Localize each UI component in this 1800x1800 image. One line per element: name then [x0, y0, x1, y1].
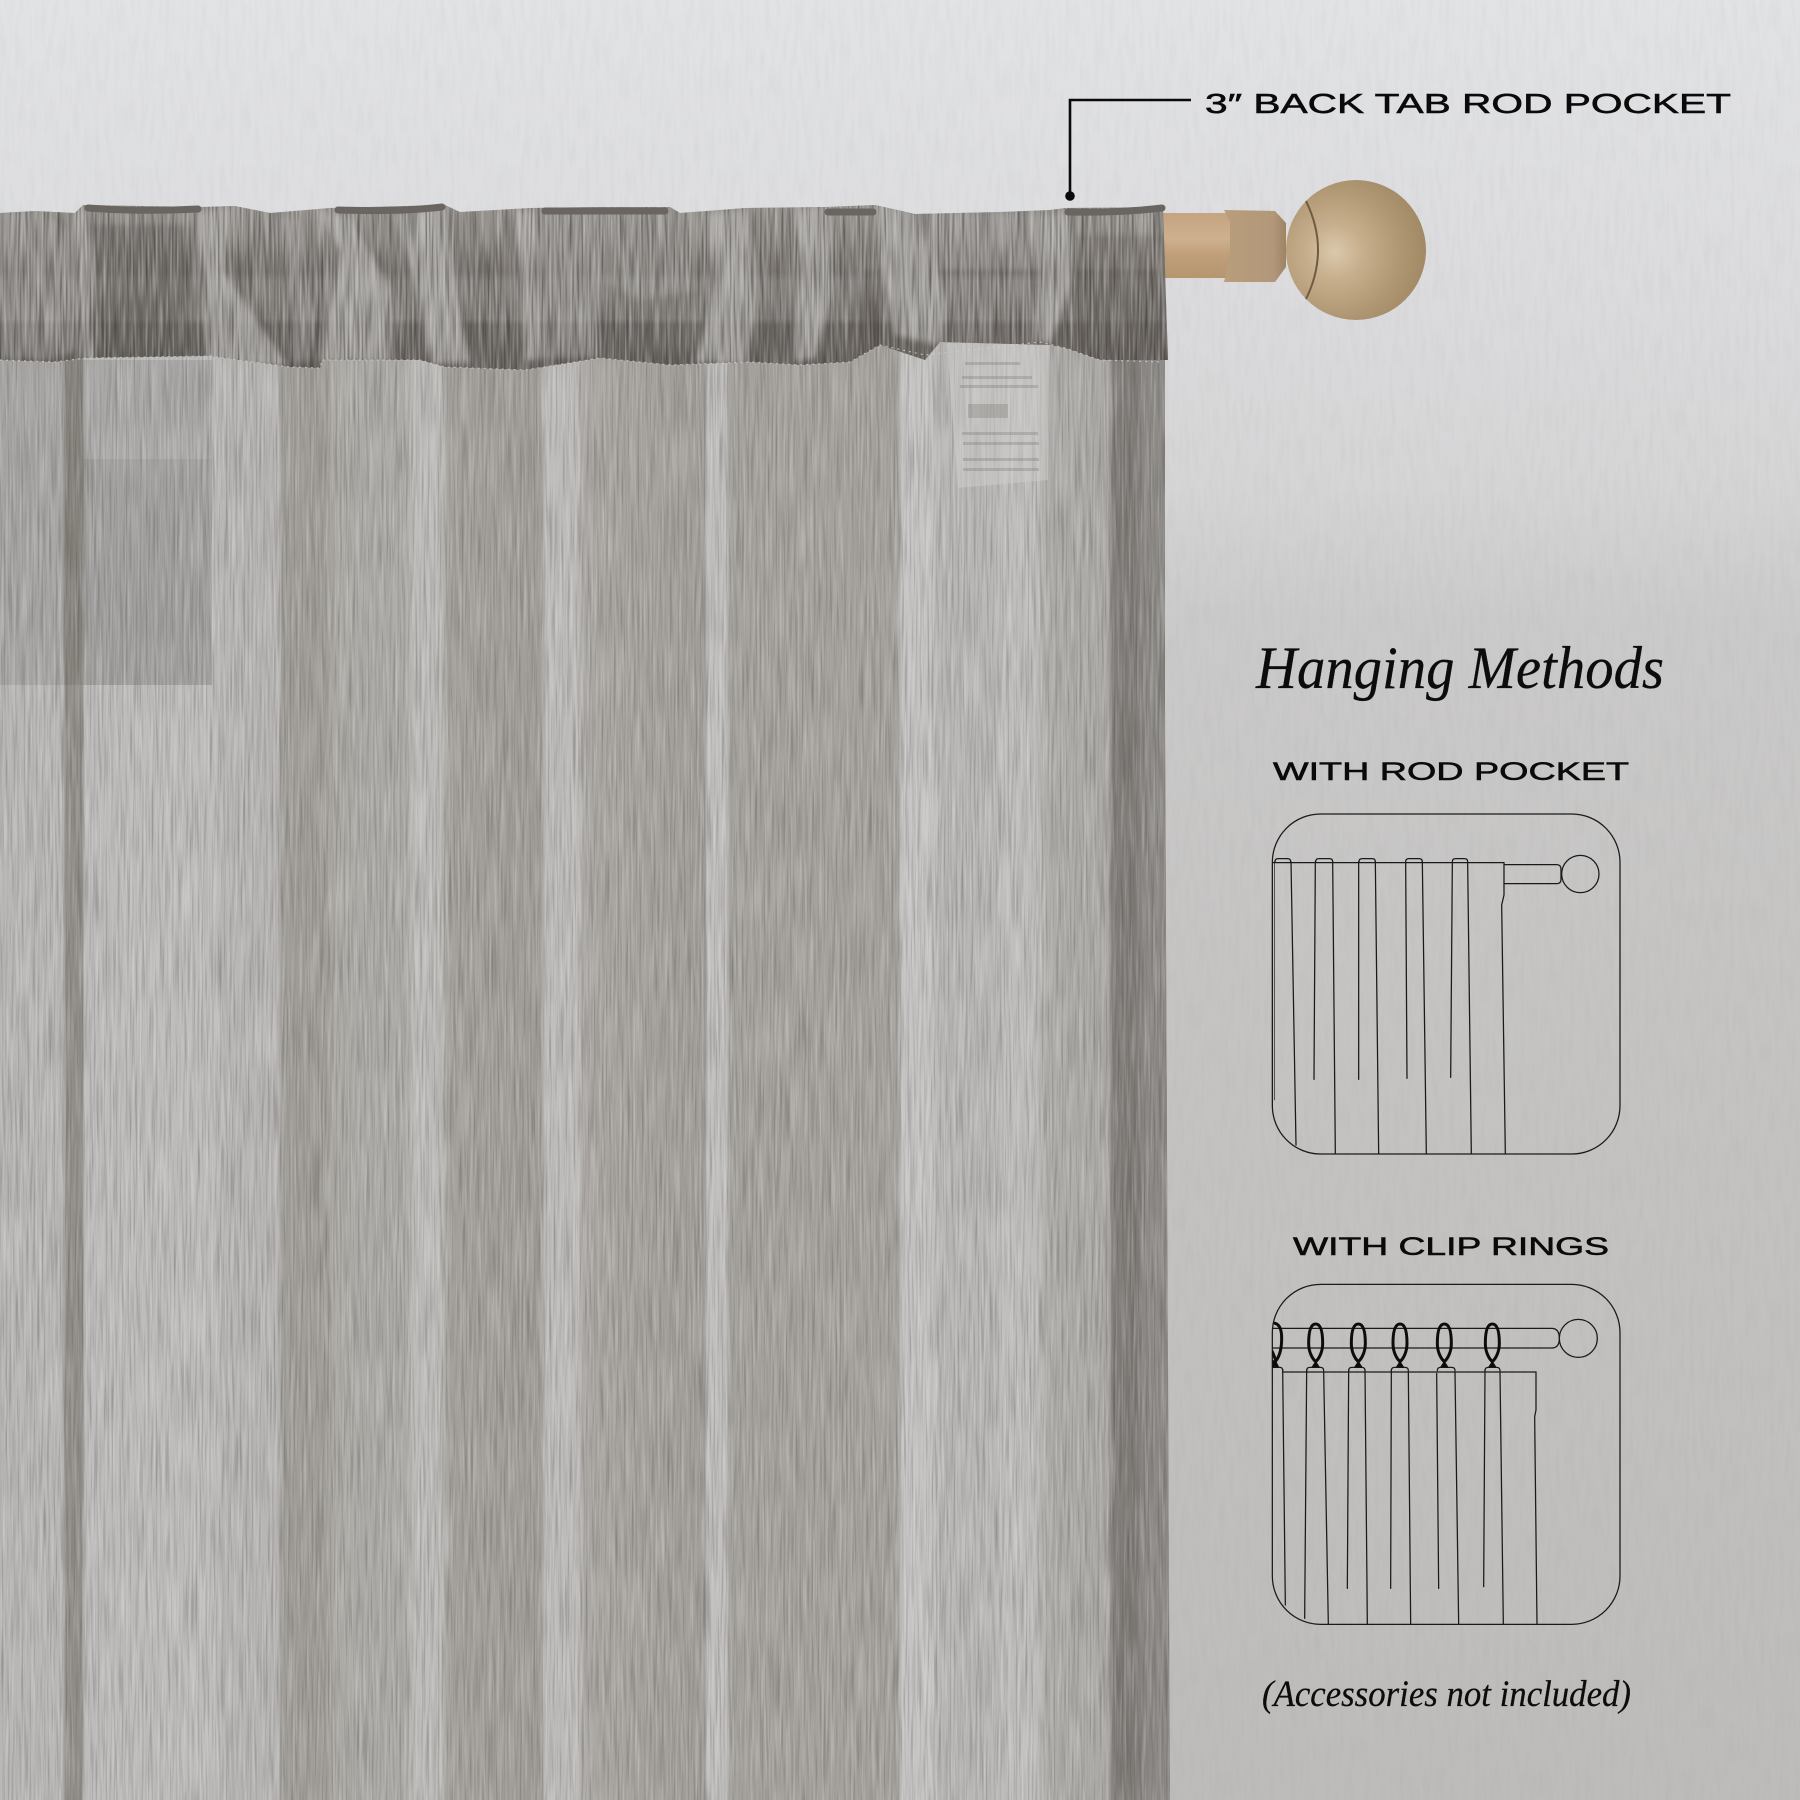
light folds — [0, 203, 1163, 366]
label: with rod pocket: WITH ROD POCKET — [1273, 758, 1629, 786]
crinkle texture — [0, 340, 1170, 1800]
curtain panel — [0, 200, 1170, 1800]
pleat texture — [0, 200, 1170, 375]
sheer fabric bands — [0, 340, 1170, 1800]
ball finial — [1286, 180, 1426, 320]
leader line — [1070, 100, 1191, 192]
tonal columns — [85, 225, 1165, 365]
curtain rod and finial — [1160, 180, 1426, 320]
label: with clip rings: WITH CLIP RINGS — [1293, 1233, 1609, 1261]
care label seen through the fabric — [947, 335, 1050, 488]
back tab top edges — [88, 207, 1162, 212]
icon: clip rings diagram — [1272, 1284, 1620, 1624]
collar — [1224, 210, 1286, 282]
gathered rod pocket — [0, 200, 1170, 375]
icon: rod pocket diagram — [1272, 814, 1620, 1154]
clip rings — [1272, 1323, 1499, 1362]
heading: Hanging Methods — [1255, 635, 1664, 701]
rod — [1160, 213, 1230, 278]
panel: hanging methods — [1255, 635, 1664, 1715]
stitching line — [0, 342, 1163, 370]
callout: back tab rod pocket — [1065, 88, 1731, 201]
window shadow behind the sheer — [0, 360, 212, 685]
leader dot — [1065, 191, 1075, 201]
note: accessories not included: (Accessories not included) — [1262, 1674, 1631, 1715]
callout text: 3″ BACK TAB ROD POCKET — [1205, 88, 1731, 119]
